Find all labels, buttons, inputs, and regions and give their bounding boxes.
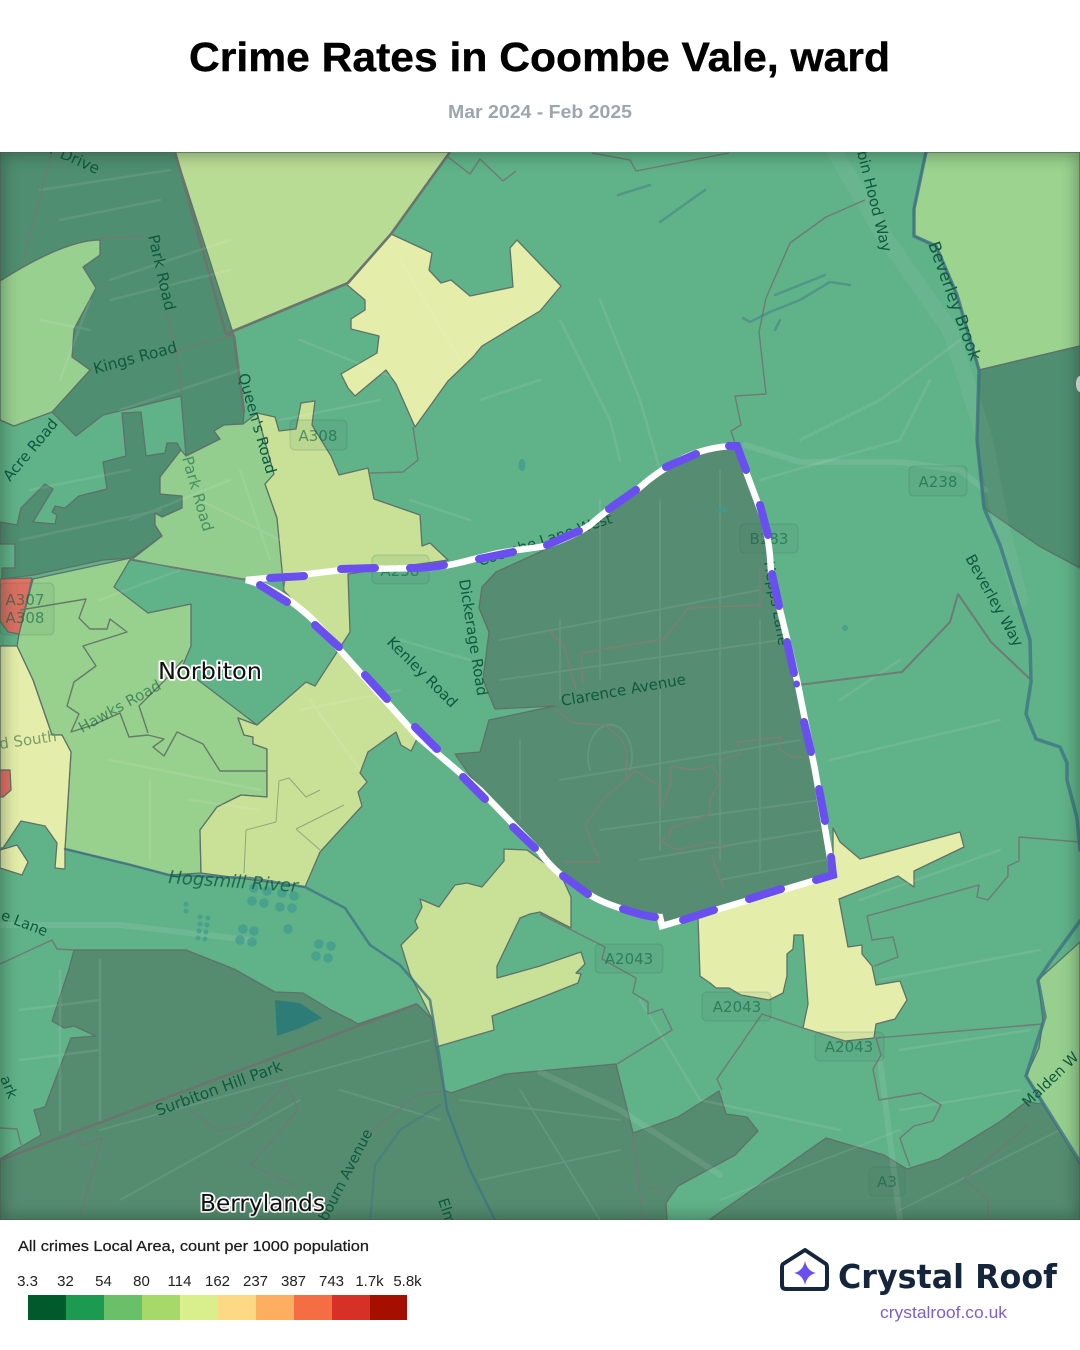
road network (0, 152, 1060, 1220)
boundaries inside dark south-west (71, 1083, 444, 1220)
road shields: A307 (6, 591, 44, 609)
legend scale labels: 3.3 (17, 1273, 38, 1290)
legend scale labels: 1.7k (355, 1273, 384, 1290)
boundaries inside dark ward (547, 567, 805, 890)
road shields: A308 (299, 427, 337, 445)
street labels: bourn Avenue (316, 1127, 376, 1224)
road shields: B283 (750, 530, 788, 548)
street labels: Dickerage Road (455, 578, 491, 697)
logo wordmark: Crystal Roof (838, 1257, 1058, 1296)
legend scale labels: 80 (133, 1273, 150, 1290)
road shields: A2043 (713, 998, 761, 1016)
street labels: Hepps Lane (760, 560, 791, 647)
road shields: A3 (877, 1173, 897, 1191)
thick district boundaries (0, 152, 450, 1160)
map base: mid green areas (0, 152, 1080, 1220)
legend colour ramp (28, 1295, 407, 1320)
logo: Crystal Roof (782, 1250, 1058, 1322)
white marker at map edge (1076, 376, 1080, 392)
map edge vignette (0, 152, 1080, 1220)
website url: crystalroof.co.uk (880, 1304, 1008, 1322)
legend scale labels: 5.8k (393, 1273, 422, 1290)
subtitle: date range: Mar 2024 - Feb 2025 (448, 102, 632, 122)
legend (17, 1238, 422, 1320)
choropleth regions (0, 152, 1080, 1220)
road shields: A2043 (825, 1038, 873, 1056)
street labels: Beverley Way (962, 551, 1027, 650)
street labels: Park Road (144, 233, 179, 312)
street labels: Kenley Road (383, 633, 461, 711)
legend scale labels: 387 (281, 1273, 306, 1290)
legend scale labels: 237 (243, 1273, 268, 1290)
rivers (65, 152, 1080, 1220)
inner ward boundaries (0, 152, 1080, 1220)
street labels: Coombe Lane West (476, 511, 615, 570)
street labels: e Lane (0, 908, 50, 940)
street labels: Surbiton Hill Park (153, 1057, 285, 1120)
road shields: A238 (381, 562, 419, 580)
road shields (0, 420, 967, 1196)
legend scale labels: 743 (319, 1273, 344, 1290)
street labels: Clarence Avenue (560, 670, 687, 710)
legend scale labels: 114 (168, 1273, 191, 1290)
place name: Norbiton: Norbiton (158, 659, 262, 685)
icon: house with star (782, 1250, 827, 1289)
street labels: Elm (434, 1196, 458, 1227)
legend title: All crimes Local Area, count per 1000 population (18, 1238, 369, 1255)
ponds and filter beds (184, 459, 848, 1036)
road shields: A238 (919, 473, 957, 491)
legend scale labels: 162 (205, 1273, 230, 1290)
legend scale labels: 32 (57, 1273, 74, 1290)
place name: Berrylands: Berrylands (200, 1191, 325, 1217)
street labels: Kings Road (91, 338, 179, 378)
road shields: A308 (6, 609, 44, 627)
street labels: Park Road (178, 454, 217, 533)
boundaries inside south yellow-green (244, 778, 344, 873)
Norbiton internal boundary (20, 599, 267, 771)
legend scale labels (17, 1273, 422, 1290)
road shields: A2043 (605, 950, 653, 968)
ward boundary: Coombe Vale (246, 446, 833, 926)
street labels: bin Hood Way (853, 149, 896, 254)
street labels: Acre Road (0, 415, 62, 485)
street labels: Queen's Road (234, 371, 280, 476)
street labels: Beverley Brook (924, 239, 985, 364)
street labels: Hogsmill River (168, 867, 301, 897)
title: Crime Rates in Coombe Vale, ward (189, 34, 890, 80)
street labels: or Drive (38, 136, 102, 178)
legend scale labels: 54 (95, 1273, 112, 1290)
street labels: Hawks Road (75, 676, 164, 736)
